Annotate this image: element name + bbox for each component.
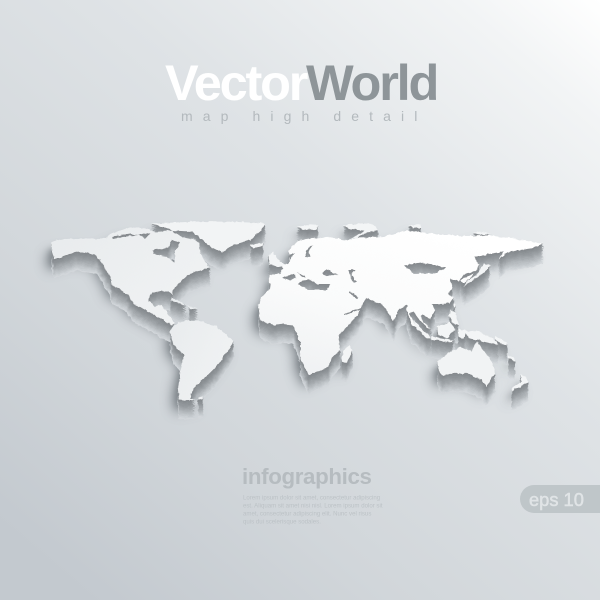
lorem ipsum text block: est. Aliquam sit amet nisi nisl. Lorem ipsum dolor sit	[243, 502, 383, 510]
infographics heading: infographics	[242, 464, 372, 489]
title: Vector World	[165, 54, 437, 111]
subtitle: map high detail	[181, 108, 427, 124]
lorem ipsum text block: Lorem ipsum dolor sit amet, consectetur adipiscing	[243, 494, 380, 502]
continent surfaces	[52, 222, 543, 401]
lorem ipsum text block: quis dui scelerisque sodales.	[243, 518, 321, 526]
eps 10 badge: eps 10	[529, 489, 584, 510]
cast shadow	[46, 230, 540, 413]
Australia	[437, 342, 495, 387]
eps 10 badge	[520, 485, 600, 513]
title: Vector World: World	[306, 54, 437, 111]
North America	[52, 223, 210, 325]
islands	[250, 223, 528, 392]
extruded sides	[52, 223, 543, 420]
world map 3D	[46, 222, 543, 420]
Eurasia and Africa	[258, 231, 543, 376]
Greenland	[152, 222, 266, 252]
lorem ipsum text block	[243, 494, 383, 526]
South America and Caribbean	[170, 297, 234, 401]
lorem ipsum text block: amet, consectetur adipiscing elit. Nunc vel risus	[243, 510, 371, 518]
title: Vector World: Vector	[165, 54, 308, 111]
